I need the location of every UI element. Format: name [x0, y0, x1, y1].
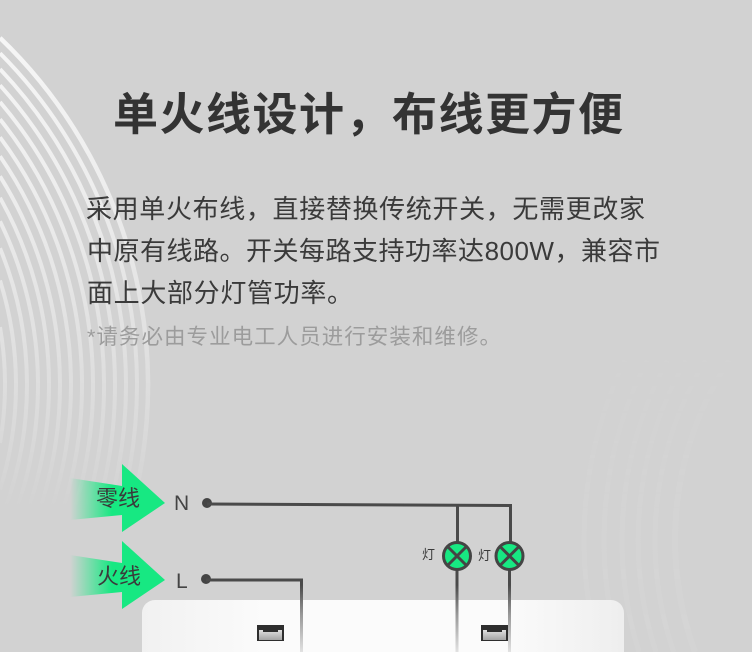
- lamp label 1: 灯: [422, 547, 435, 562]
- switch panel: [142, 600, 624, 652]
- arrow: neutral wire: [70, 464, 165, 532]
- lamp 1: [444, 542, 470, 570]
- decorative concentric arcs: left: [0, 38, 148, 600]
- live wire: [201, 574, 302, 652]
- arrow: live wire: [70, 541, 165, 609]
- arrow: live wire: 火线: [97, 564, 141, 589]
- title: 单火线设计，布线更方便: [113, 89, 623, 140]
- wires below lamps: [457, 568, 510, 652]
- lamp 2: [496, 542, 523, 570]
- decorative concentric arcs: right: [584, 360, 729, 652]
- switch button 1: [257, 625, 284, 641]
- body text: 中原有线路。开关每路支持功率达800W，兼容市: [87, 236, 660, 266]
- body text: 采用单火布线，直接替换传统开关，无需更改家: [86, 194, 645, 224]
- body text: [86, 194, 660, 308]
- safety note: *请务必由专业电工人员进行安装和维修。: [87, 325, 501, 349]
- switch button 2: [481, 625, 508, 641]
- label: N: N: [174, 492, 189, 515]
- neutral wire: [202, 498, 510, 545]
- body text: 面上大部分灯管功率。: [87, 278, 353, 308]
- lamp label 2: 灯: [478, 548, 491, 563]
- label: L: L: [176, 570, 188, 593]
- arrow: neutral wire: 零线: [96, 486, 140, 511]
